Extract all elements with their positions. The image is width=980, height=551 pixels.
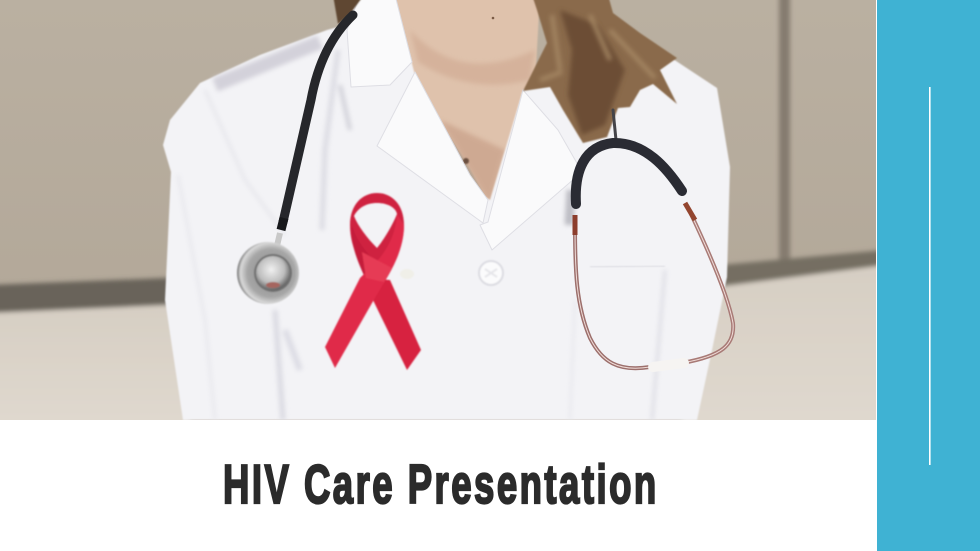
tube: lower loop bbox=[575, 225, 650, 368]
tube: left side bbox=[283, 15, 353, 222]
red awareness ribbon bbox=[325, 193, 421, 370]
hair bbox=[333, 0, 677, 143]
tube: hanging strap bbox=[613, 110, 616, 140]
side panel bbox=[877, 0, 980, 551]
coat pocket line bbox=[590, 266, 665, 267]
stethoscope chest piece bbox=[237, 242, 299, 304]
photo: doctor with red ribbon bbox=[0, 0, 885, 430]
white lab coat bbox=[163, 0, 730, 420]
tube: red end sleeves bbox=[572, 215, 578, 235]
photo background: wall and bed bbox=[0, 0, 885, 430]
tube: white connector bbox=[653, 363, 684, 367]
skin: neck and chest bbox=[396, 0, 539, 200]
chest piece stem bbox=[276, 233, 280, 250]
ribbon pin bbox=[400, 270, 414, 278]
stethoscope bbox=[276, 15, 733, 368]
title: HIV Care Presentation bbox=[223, 454, 659, 515]
coat button bbox=[479, 261, 503, 285]
coat shading folds bbox=[178, 42, 665, 420]
panel divider line bbox=[929, 87, 931, 465]
tube: right arch bbox=[576, 143, 682, 204]
coat collar and lapels bbox=[347, 0, 582, 250]
